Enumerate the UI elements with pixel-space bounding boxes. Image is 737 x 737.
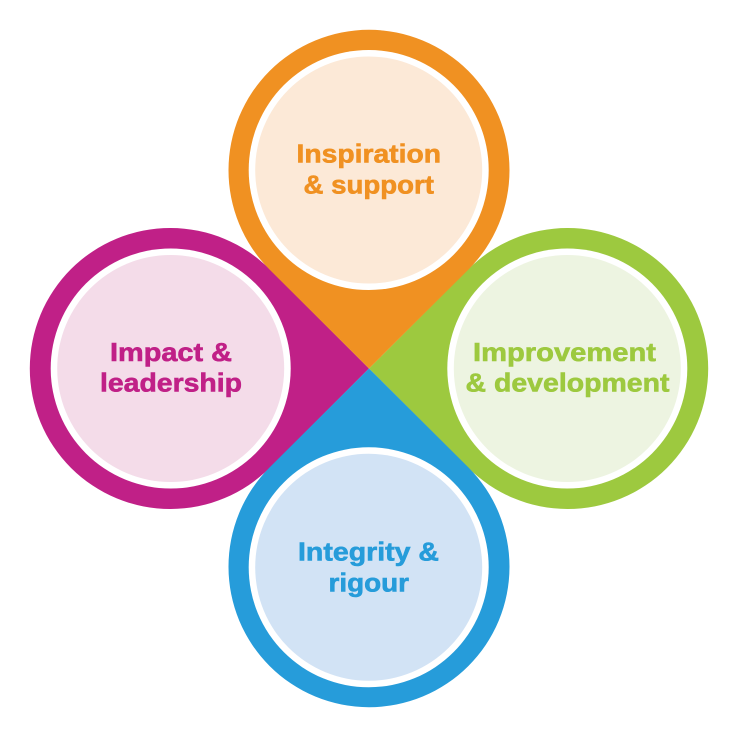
label: Inspiration & support <box>296 138 441 199</box>
petal: Improvement & development <box>369 228 708 509</box>
label: Impact & leadership <box>100 337 242 398</box>
petal: Impact & leadership <box>30 228 369 509</box>
label: Impact & leadership: leadership <box>100 368 242 398</box>
label: Improvement & development: & development <box>466 368 670 398</box>
petal: Integrity & rigour <box>229 368 510 707</box>
petal: Inspiration & support <box>229 30 510 368</box>
label: Integrity & rigour <box>298 537 439 597</box>
label: Inspiration & support: & support <box>304 169 434 199</box>
label: Integrity & rigour: rigour <box>328 567 409 597</box>
label: Integrity & rigour: Integrity & <box>298 537 439 567</box>
label: Inspiration & support: Inspiration <box>296 138 441 168</box>
label: Improvement & development: Improvement <box>473 337 656 367</box>
label: Improvement & development <box>466 337 670 398</box>
label: Impact & leadership: Impact & <box>110 337 232 367</box>
